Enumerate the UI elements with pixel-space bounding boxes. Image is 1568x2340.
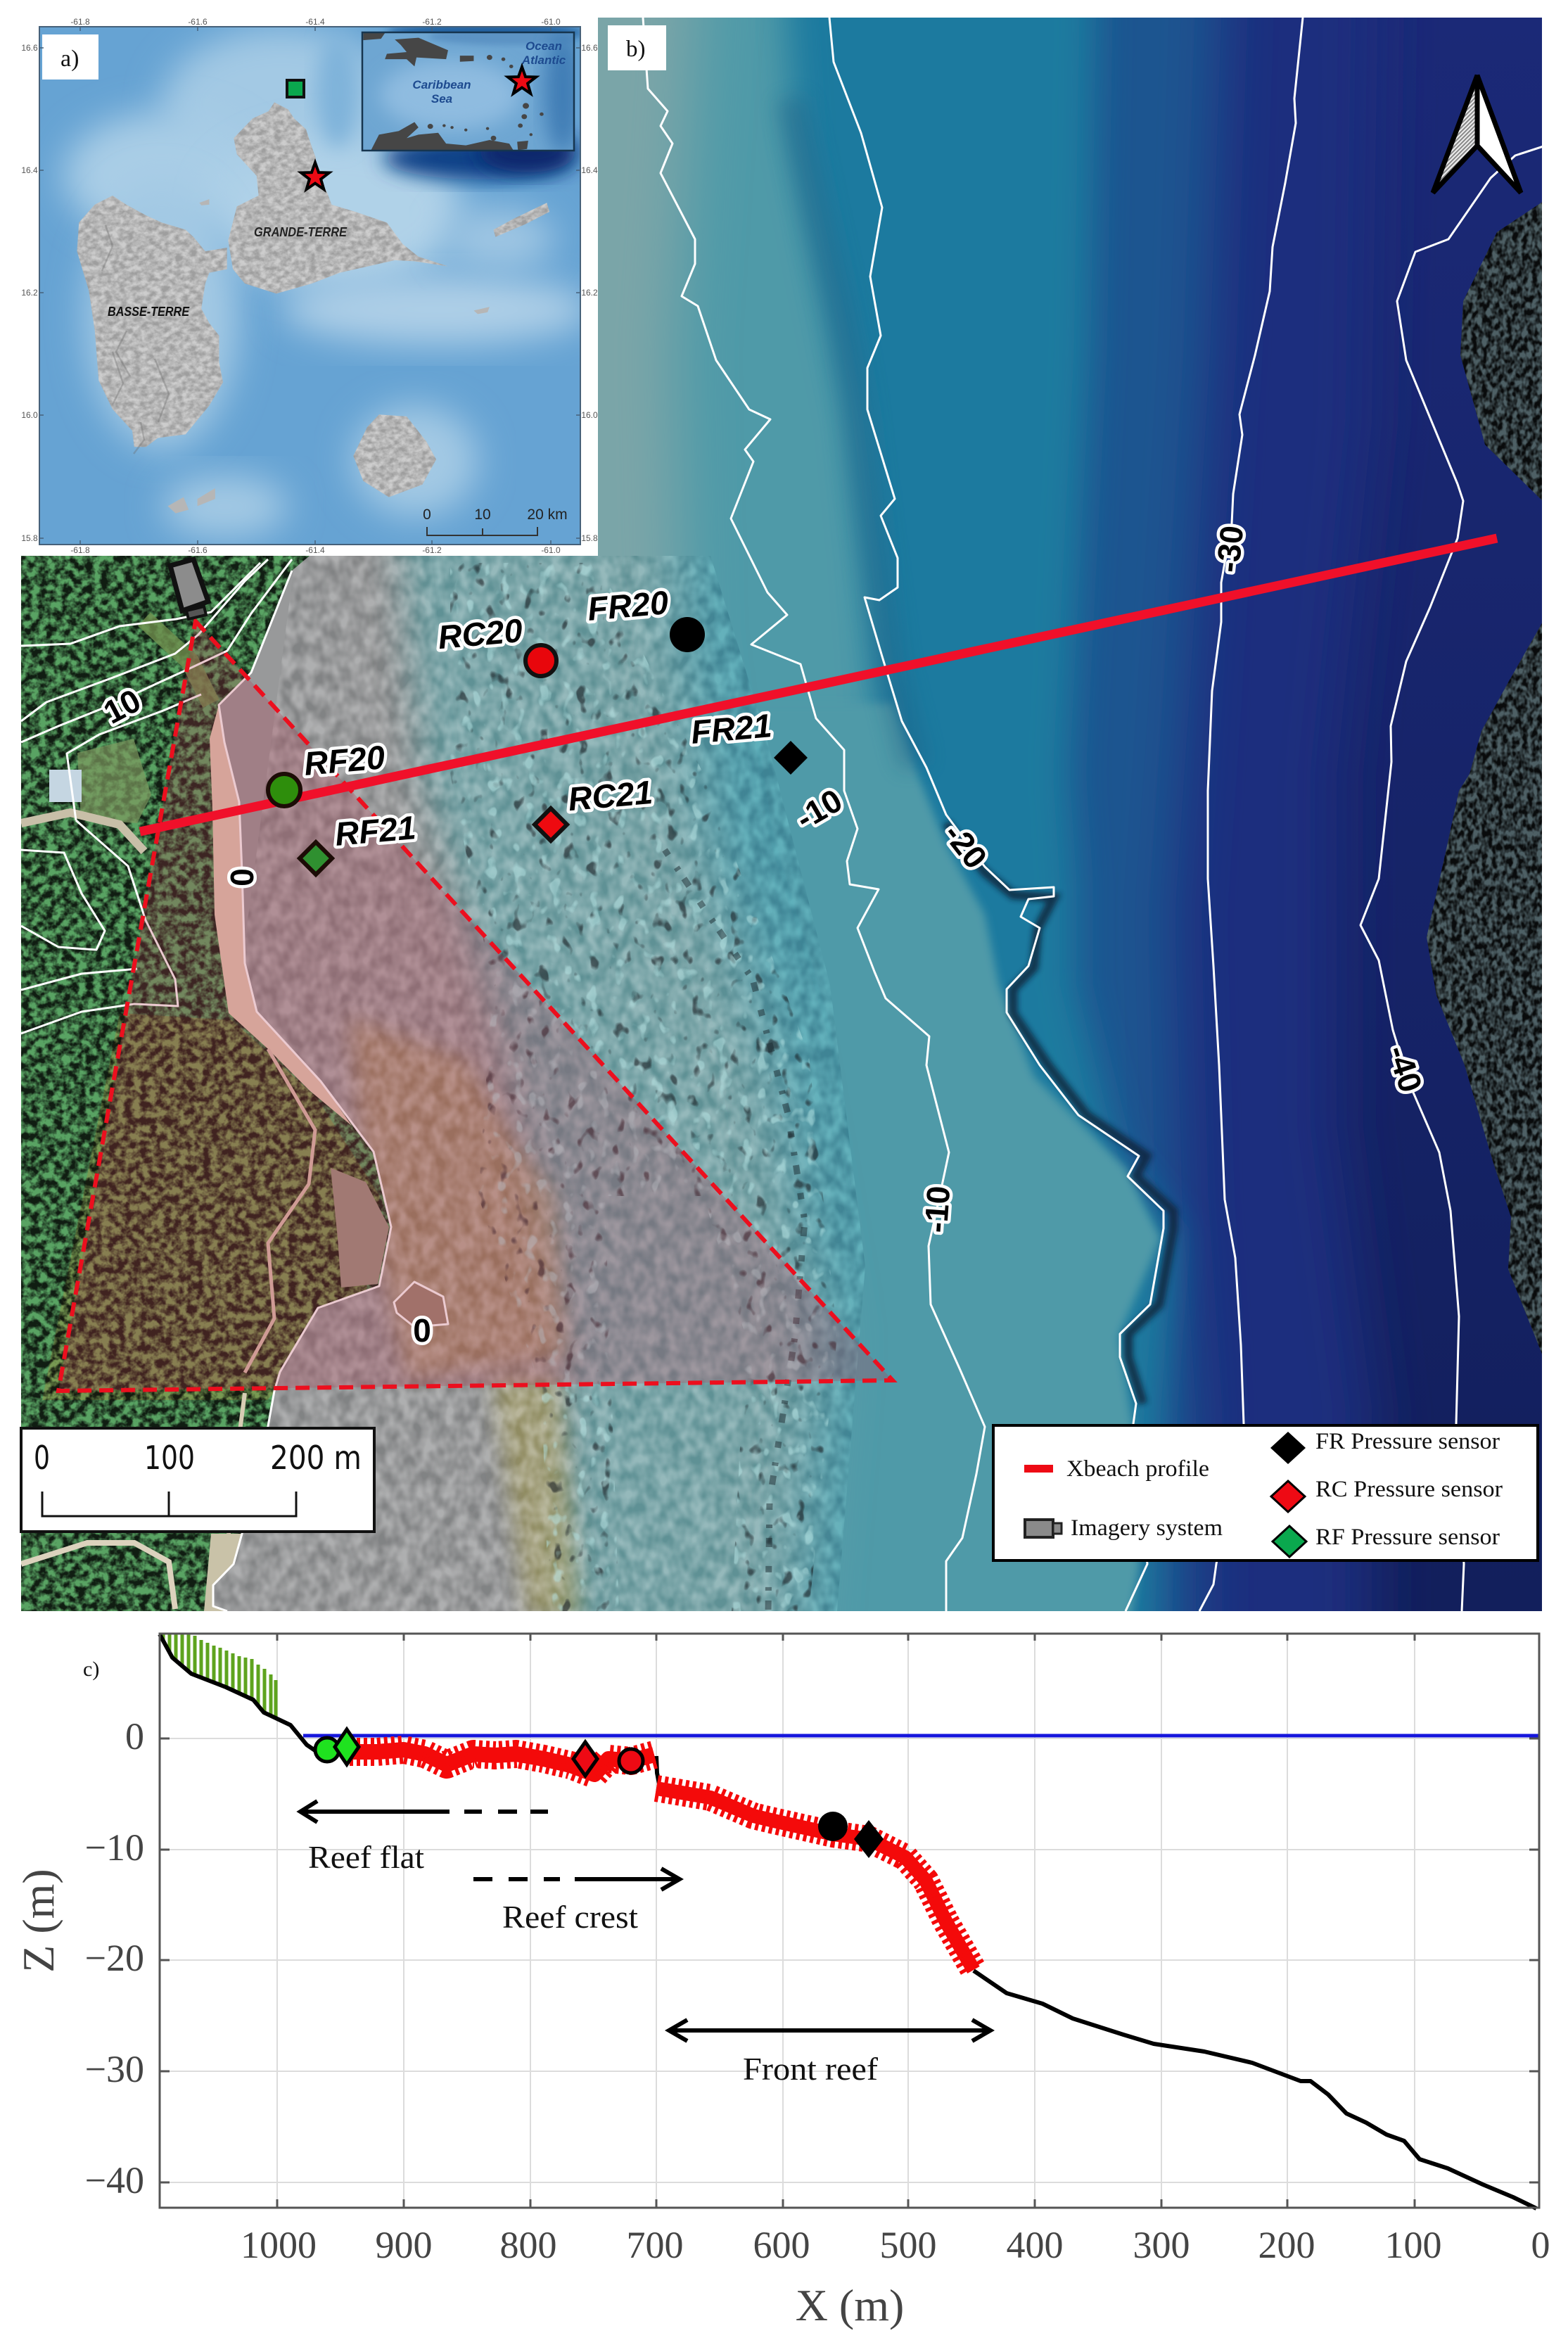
label FR21: FR21 (689, 706, 773, 751)
x tick labels: 700 (626, 2224, 684, 2266)
label Grande-Terre: GRANDE-TERRE (254, 225, 348, 239)
y tick labels: −10 (85, 1826, 144, 1869)
axes frame (160, 1634, 1539, 2208)
RF circle marker (315, 1738, 339, 1762)
map scale bar box: 200 m (270, 1439, 362, 1477)
contour label -10 lower: -10 (917, 1185, 957, 1234)
label RC20: RC20 (436, 611, 524, 656)
camera field of view triangle (58, 621, 893, 1391)
inset: Caribbean (362, 28, 598, 155)
green square marker (287, 80, 304, 97)
tick labels of map a: -61.4 (305, 545, 325, 555)
tick labels of map a: -61.4 (305, 17, 325, 27)
sensor RC21 (535, 773, 654, 841)
legend item: FR pressure sensor (1270, 1429, 1500, 1464)
y tick labels (85, 1715, 144, 2201)
legend item: FR pressure sensor: FR Pressure sensor (1315, 1429, 1500, 1454)
RC diamond marker (573, 1742, 597, 1776)
label c): c) (83, 1658, 99, 1681)
panel a: Guadeloupe location map (20, 16, 598, 556)
contour label 0 beach: 0 (224, 868, 260, 886)
RC circle marker (619, 1749, 643, 1773)
text: reef crest: Reef crest (502, 1900, 639, 1935)
text: front reef: Front reef (743, 2052, 878, 2087)
sensor RF20 (268, 738, 386, 806)
x tick labels: 200 (1258, 2224, 1315, 2266)
sensor RF21 (300, 808, 417, 875)
contour label -20: -20 (937, 816, 995, 875)
y axis title: Z (m) (13, 1869, 63, 1973)
contour lines (21, 18, 1545, 1611)
tick labels of map a: 16.2 (21, 288, 38, 298)
tick labels of map a: 16.4 (581, 165, 598, 175)
label a) (42, 34, 98, 80)
water level line (303, 1734, 1539, 1738)
tick labels of map a: 16.6 (581, 43, 598, 53)
tick labels of map a: -61.0 (541, 17, 561, 27)
scale bar of map a: 20 km (527, 507, 568, 523)
vegetation hatching (163, 1634, 276, 1718)
sensor RC20 (436, 611, 556, 676)
scale bar of map a: 0 (423, 507, 431, 523)
x tick labels: 300 (1133, 2224, 1190, 2266)
legend item: RF pressure sensor: RF Pressure sensor (1315, 1525, 1500, 1550)
sensor FR21 (689, 706, 808, 775)
x axis title: X (m) (796, 2280, 904, 2330)
contour label -30: -30 (1209, 524, 1250, 574)
label b) (608, 25, 666, 70)
inset label Caribbean Sea: Sea (431, 92, 452, 106)
arrow: reef flat (300, 1801, 548, 1822)
y tick labels: −30 (85, 2048, 144, 2090)
y tick labels: −20 (85, 1937, 144, 1979)
x tick labels: 0 (1531, 2224, 1550, 2266)
tick labels of map a: 16.4 (21, 165, 38, 175)
dark rocky patches on the right edge (1427, 203, 1542, 1354)
Xbeach profile line (140, 538, 1497, 832)
legend item: RC pressure sensor: RC Pressure sensor (1315, 1477, 1503, 1502)
x tick labels: 1000 (241, 2224, 317, 2266)
label Basse-Terre: BASSE-TERRE (108, 305, 190, 319)
north arrow (1433, 75, 1521, 193)
tick labels of map a: 16.2 (581, 288, 598, 298)
islands of Guadeloupe (70, 91, 563, 514)
y tick labels: 0 (125, 1715, 144, 1757)
inset label Caribbean Sea: Caribbean (412, 78, 471, 91)
tick labels of map a: -61.6 (188, 17, 208, 27)
map scale bar box (21, 1428, 374, 1532)
panel c: cross-shore profile chart (13, 1634, 1550, 2330)
FR diamond marker (854, 1820, 884, 1858)
scale bar of map a (423, 507, 568, 535)
legend item: imagery system: Imagery system (1071, 1515, 1223, 1541)
contour label 0 islet: 0 (413, 1312, 431, 1349)
label RF21: RF21 (333, 808, 417, 853)
study site star (301, 163, 329, 189)
legend item: RC pressure sensor (1271, 1477, 1503, 1512)
FR circle marker (818, 1812, 848, 1841)
y tick labels: −40 (85, 2159, 144, 2201)
x tick labels: 500 (879, 2224, 937, 2266)
label FR20: FR20 (586, 583, 670, 628)
inset label Ocean Atlantic: Ocean (525, 39, 562, 53)
x tick labels: 400 (1006, 2224, 1064, 2266)
tick labels of map a: 16.0 (581, 410, 598, 420)
label RC21: RC21 (566, 773, 654, 818)
legend (993, 1425, 1538, 1560)
x tick labels: 900 (376, 2224, 432, 2266)
tick labels of map a: 15.8 (21, 533, 38, 543)
camera icon on map (170, 559, 208, 619)
reef section star markers (350, 1750, 974, 1970)
frame of map a (39, 27, 580, 545)
sensor FR20 (586, 583, 705, 652)
gridlines (160, 1634, 1539, 2208)
tick labels of map a: -61.6 (188, 545, 208, 555)
x tick labels: 600 (753, 2224, 810, 2266)
tick labels of map a: -61.8 (70, 545, 90, 555)
text: reef flat: Reef flat (308, 1840, 425, 1875)
land: coast, vegetation and beach (21, 549, 415, 1618)
inset label Ocean Atlantic: Atlantic (521, 53, 566, 67)
tick labels of map a (21, 17, 598, 555)
x tick labels: 800 (499, 2224, 557, 2266)
tick labels of map a: 16.6 (21, 43, 38, 53)
inset star (508, 67, 536, 94)
contour label -40: -40 (1380, 1041, 1429, 1097)
x tick labels: 100 (1384, 2224, 1442, 2266)
legend item: RF pressure sensor (1273, 1525, 1500, 1557)
tick labels of map a: -61.8 (70, 17, 90, 27)
RF diamond marker (335, 1729, 359, 1764)
arrow: reef crest (473, 1869, 680, 1890)
tick labels of map a: 15.8 (581, 533, 598, 543)
map scale bar box: 0 (34, 1439, 50, 1477)
tick labels of map a: -61.2 (422, 17, 442, 27)
scale bar of map a: 10 (474, 507, 491, 523)
label RF20: RF20 (302, 738, 386, 782)
contour label -10 upper: -10 (789, 782, 848, 837)
label b): b) (626, 37, 646, 62)
label a): a) (60, 46, 79, 72)
arrow: front reef (669, 2020, 990, 2041)
contour label 10: 10 (98, 682, 146, 731)
tick labels of map a: -61.2 (422, 545, 442, 555)
legend item: Xbeach profile: Xbeach profile (1066, 1456, 1209, 1482)
tick labels of map a: -61.0 (541, 545, 561, 555)
bathymetry profile line (160, 1634, 1536, 2208)
x tick labels (241, 2224, 1550, 2266)
map scale bar box: 100 (144, 1439, 195, 1477)
tick labels of map a: 16.0 (21, 410, 38, 420)
